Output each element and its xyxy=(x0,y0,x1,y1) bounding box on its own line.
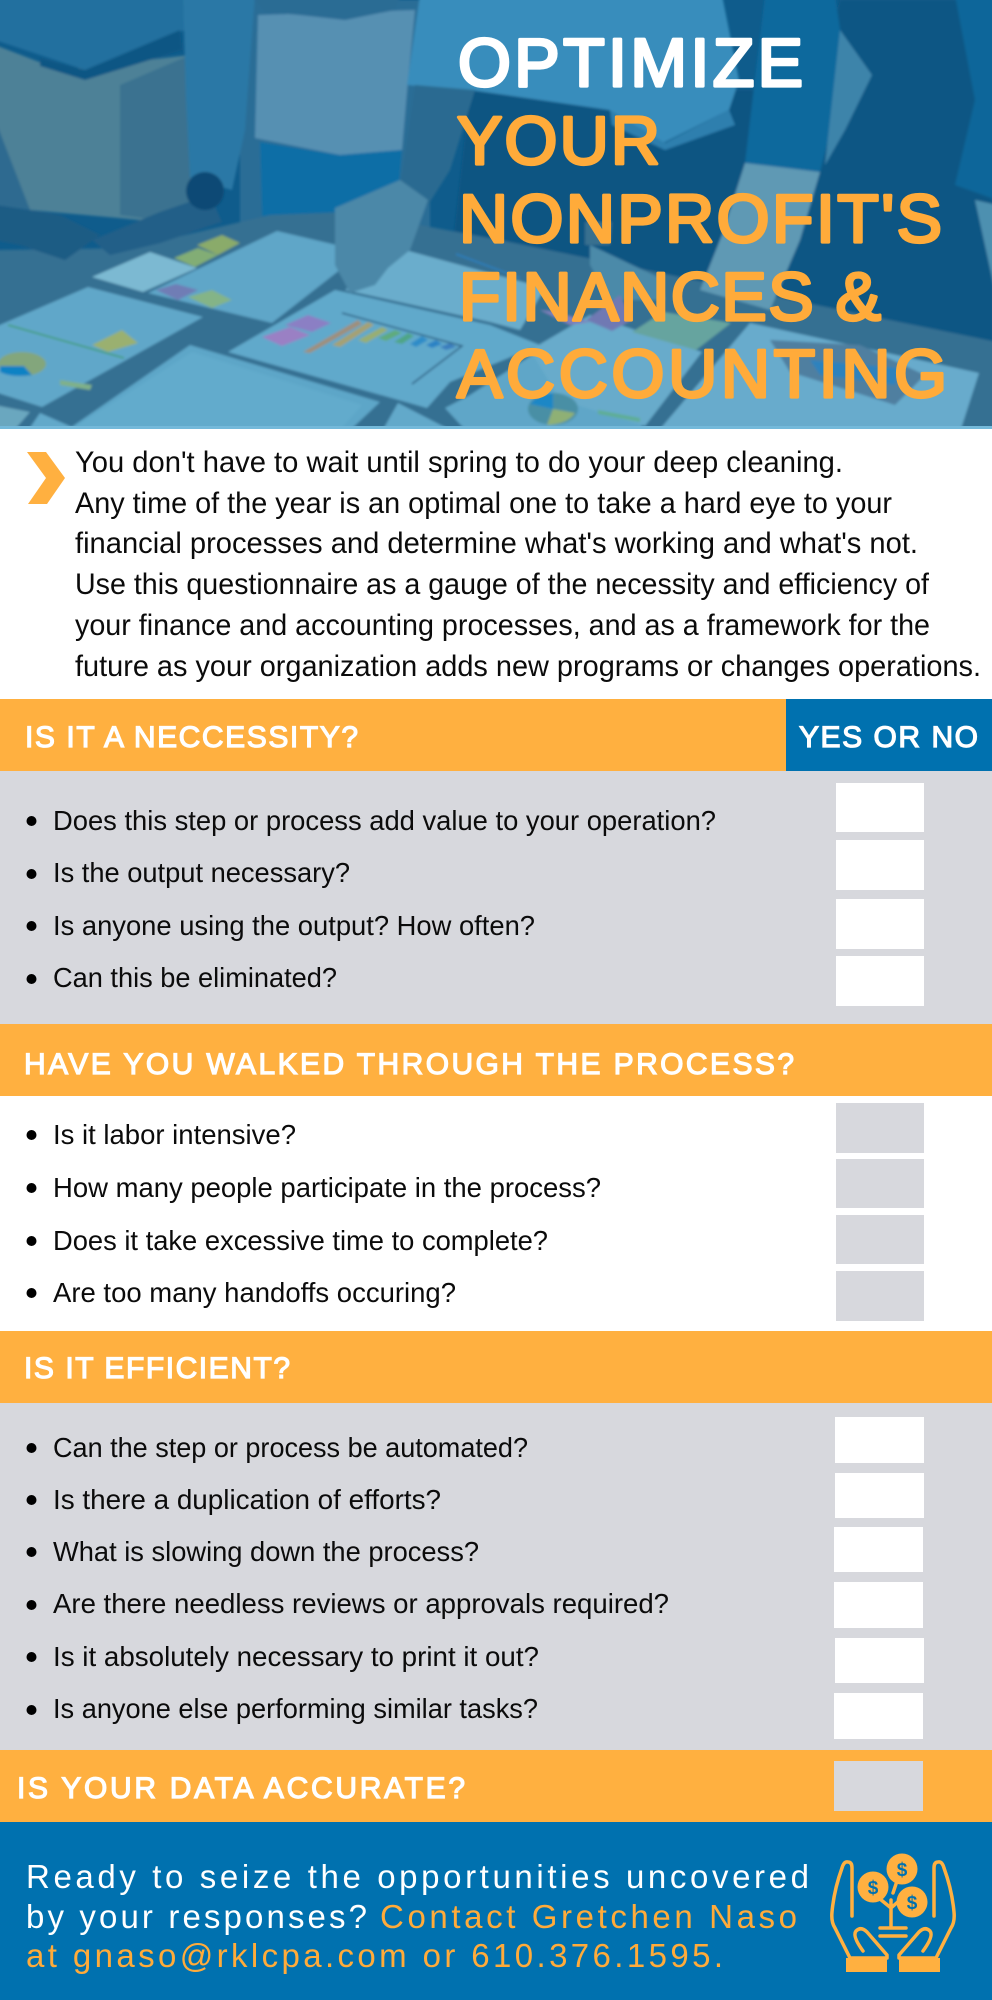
question list: Are too many handoffs occuring? xyxy=(53,1277,456,1308)
footer text: Ready to seize the opportunities uncovered xyxy=(26,1858,809,1895)
footer text: at gnaso@rklcpa.com or 610.376.1595. xyxy=(26,1937,723,1974)
section header: walked through the process: HAVE YOU WALKED THROUGH THE PROCESS? xyxy=(24,1048,794,1081)
footer text: Contact Gretchen Naso xyxy=(380,1898,797,1935)
panel: process questions xyxy=(0,1096,992,1331)
question list: Is anyone using the output? How often? xyxy=(53,910,535,941)
question list: Does this step or process add value to your operation? xyxy=(53,805,716,836)
icon: hands holding money plant: $ xyxy=(897,1860,908,1881)
question list: Is there a duplication of efforts? xyxy=(53,1484,441,1515)
section header: is your data accurate: IS YOUR DATA ACCURATE? xyxy=(17,1772,465,1805)
question list: Is anyone else performing similar tasks? xyxy=(53,1693,538,1724)
footer text xyxy=(26,1858,809,1974)
title line: YOUR: YOUR xyxy=(457,103,660,179)
question list xyxy=(26,1432,669,1724)
section header: walked through the process xyxy=(0,1024,992,1096)
title line: ACCOUNTING: ACCOUNTING xyxy=(457,336,947,412)
section header: Is it a neccessity xyxy=(0,699,786,771)
question list: Can this be eliminated? xyxy=(53,962,337,993)
intro text: future as your organization adds new programs or changes operations. xyxy=(75,650,981,683)
panel: efficiency questions xyxy=(0,1403,992,1750)
footer call to action xyxy=(0,1822,992,2000)
answer boxes xyxy=(836,783,924,1006)
column header: yes or no: YES OR NO xyxy=(799,721,978,754)
question list: Can the step or process be automated? xyxy=(53,1432,528,1463)
question list xyxy=(26,1119,601,1308)
title line: OPTIMIZE: OPTIMIZE xyxy=(458,25,803,101)
column header: yes or no xyxy=(786,699,992,771)
icon: hands holding money plant: $ xyxy=(907,1893,918,1914)
icon: hands holding money plant xyxy=(832,1854,954,1972)
panel: necessity questions xyxy=(0,771,992,1024)
answer box xyxy=(834,1761,923,1811)
hero photo: team reviewing financial documents xyxy=(0,0,992,435)
intro text: Any time of the year is an optimal one to take a hard eye to your xyxy=(75,487,892,520)
icon: orange chevron xyxy=(27,452,65,504)
intro text: Use this questionnaire as a gauge of the necessity and efficiency of xyxy=(75,568,930,601)
question list: Is it labor intensive? xyxy=(53,1119,296,1150)
answer boxes xyxy=(836,1103,924,1321)
intro text: You don't have to wait until spring to do your deep cleaning. xyxy=(75,446,843,479)
question list: Are there needless reviews or approvals required? xyxy=(53,1588,669,1619)
intro text: your finance and accounting processes, and as a framework for the xyxy=(75,609,930,642)
title xyxy=(457,25,947,412)
question list: How many people participate in the process? xyxy=(53,1172,601,1203)
section header: is your data accurate xyxy=(0,1750,992,1822)
question list xyxy=(26,805,716,993)
title line: FINANCES &: FINANCES & xyxy=(459,259,881,335)
title line: NONPROFIT'S: NONPROFIT'S xyxy=(459,181,942,257)
section header: Is it a neccessity: IS IT A NECCESSITY? xyxy=(25,721,358,754)
section header: is it efficient: IS IT EFFICIENT? xyxy=(24,1352,290,1385)
question list: What is slowing down the process? xyxy=(53,1536,479,1567)
footer text: by your responses? xyxy=(26,1898,367,1935)
icon: hands holding money plant: $ xyxy=(868,1878,879,1899)
intro text: financial processes and determine what's working and what's not. xyxy=(75,527,918,560)
question list: Is the output necessary? xyxy=(53,857,350,888)
answer boxes xyxy=(834,1417,924,1739)
question list: Is it absolutely necessary to print it out? xyxy=(53,1641,539,1672)
intro text xyxy=(75,446,981,683)
section header: is it efficient xyxy=(0,1331,992,1403)
question list: Does it take excessive time to complete? xyxy=(53,1225,548,1256)
